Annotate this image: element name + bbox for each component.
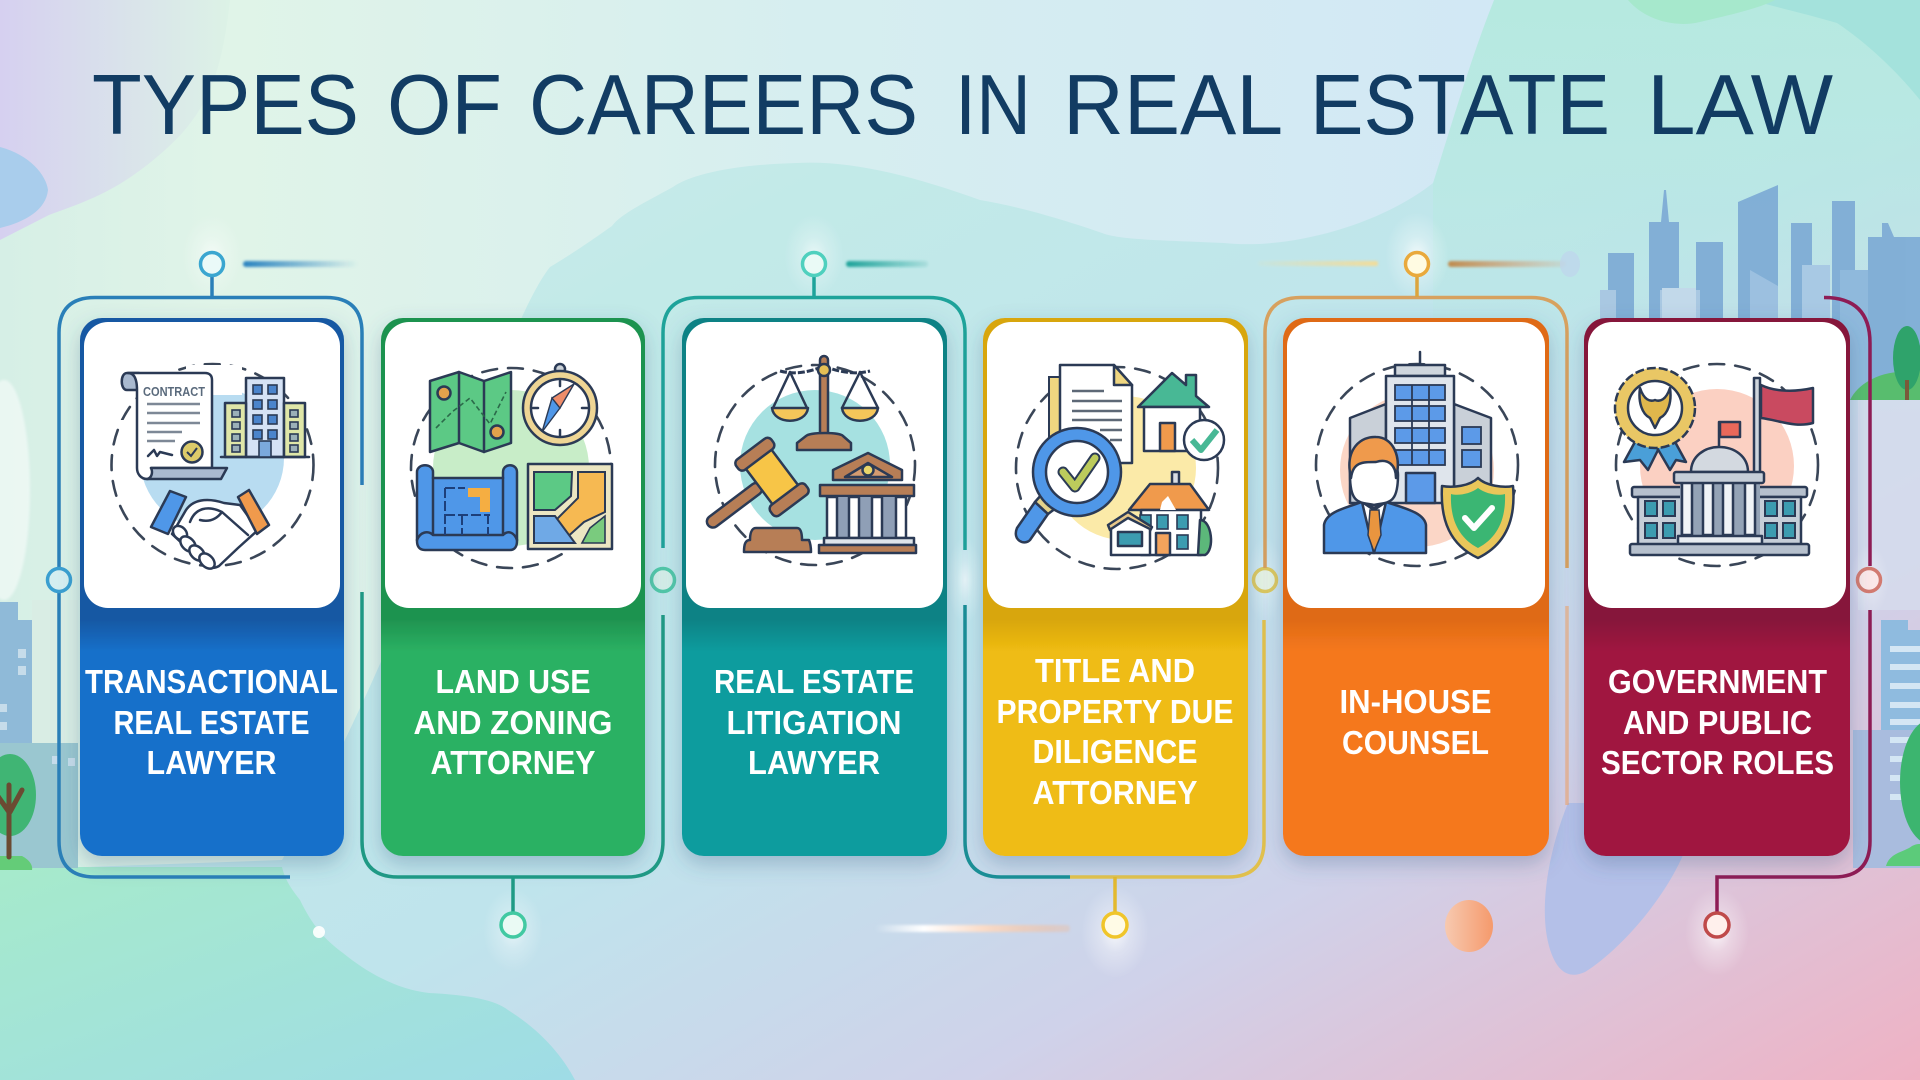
skyline: bottom left city with tree [0,600,78,870]
frame: blue connector around card 1 [48,252,362,877]
decorative periwinkle teardrop and orange ball [1445,803,1689,975]
label: TITLE AND [1035,652,1195,689]
frame: crimson connector around card 6 [1705,298,1880,937]
title: IN [955,58,1031,153]
icon panel [1588,322,1846,608]
title: ESTATE [1310,58,1610,153]
icon: contract, building and handshake: CONTRACT [143,385,205,399]
title: REAL [1063,58,1281,153]
label: TRANSACTIONAL [85,663,338,700]
icon: corporate counsel, office and shield [1316,352,1518,566]
label: ATTORNEY [430,744,596,781]
title: CAREERS [529,58,918,153]
label: LITIGATION [726,704,902,741]
card body [80,318,344,856]
icon: seal, flag and capitol building [1615,364,1818,566]
icon panel [686,322,943,608]
panel: In-House Counsel [1283,318,1549,856]
label: DILIGENCE [1032,733,1198,770]
label: LAWYER [146,744,277,781]
label: COUNSEL [1342,724,1489,761]
hill and tree: top right [1850,326,1920,610]
panel: Transactional Real Estate Lawyer [80,318,344,856]
icon: scales, gavel and courthouse [687,356,916,565]
title: LAW [1647,58,1833,153]
frame: teal connector around card 3 [652,252,965,592]
label: ATTORNEY [1032,774,1198,811]
icon panel [385,322,641,608]
card body [1283,318,1549,856]
card body [983,318,1248,856]
label [1601,663,1834,781]
skyline: top right city [1600,185,1920,400]
icon panel [1287,322,1545,608]
label: GOVERNMENT [1608,663,1827,700]
frame: yellow connector around card 4 [965,568,1276,937]
label: AND ZONING [414,704,612,741]
label: PROPERTY DUE [996,693,1234,730]
panel: Government and Public Sector Roles [1584,318,1850,856]
label [414,663,612,781]
icon panel [84,322,340,608]
panel: Real Estate Litigation Lawyer [682,318,947,856]
icon: map, compass, blueprint and site plan [411,364,612,568]
label [1340,683,1492,761]
frame: orange connector around card 5 [1265,252,1567,805]
label: IN-HOUSE [1340,683,1492,720]
card body [1584,318,1850,856]
panel: Land Use and Zoning Attorney [381,318,645,856]
connector accent dashes [243,251,1580,938]
title: OF [387,58,502,153]
icon: magnifier, documents and houses [1016,365,1224,569]
label [996,652,1234,811]
label: LAWYER [748,744,880,781]
panel: Title and Property Due Diligence Attorney [983,318,1248,856]
skyline: bottom right city with tree [1853,620,1920,868]
title: TYPES [92,58,359,153]
label [714,663,914,781]
icon panel [987,322,1244,608]
label: LAND USE [436,663,590,700]
label [85,663,338,781]
icon: contract, building and handshake [112,364,314,572]
label: AND PUBLIC [1623,704,1812,741]
decorative glows behind nodes [182,212,1889,978]
label: SECTOR ROLES [1601,744,1834,781]
card body [682,318,947,856]
label: REAL ESTATE [114,704,310,741]
frame: green connector around card 2 [362,592,663,937]
label: REAL ESTATE [714,663,914,700]
card body [381,318,645,856]
